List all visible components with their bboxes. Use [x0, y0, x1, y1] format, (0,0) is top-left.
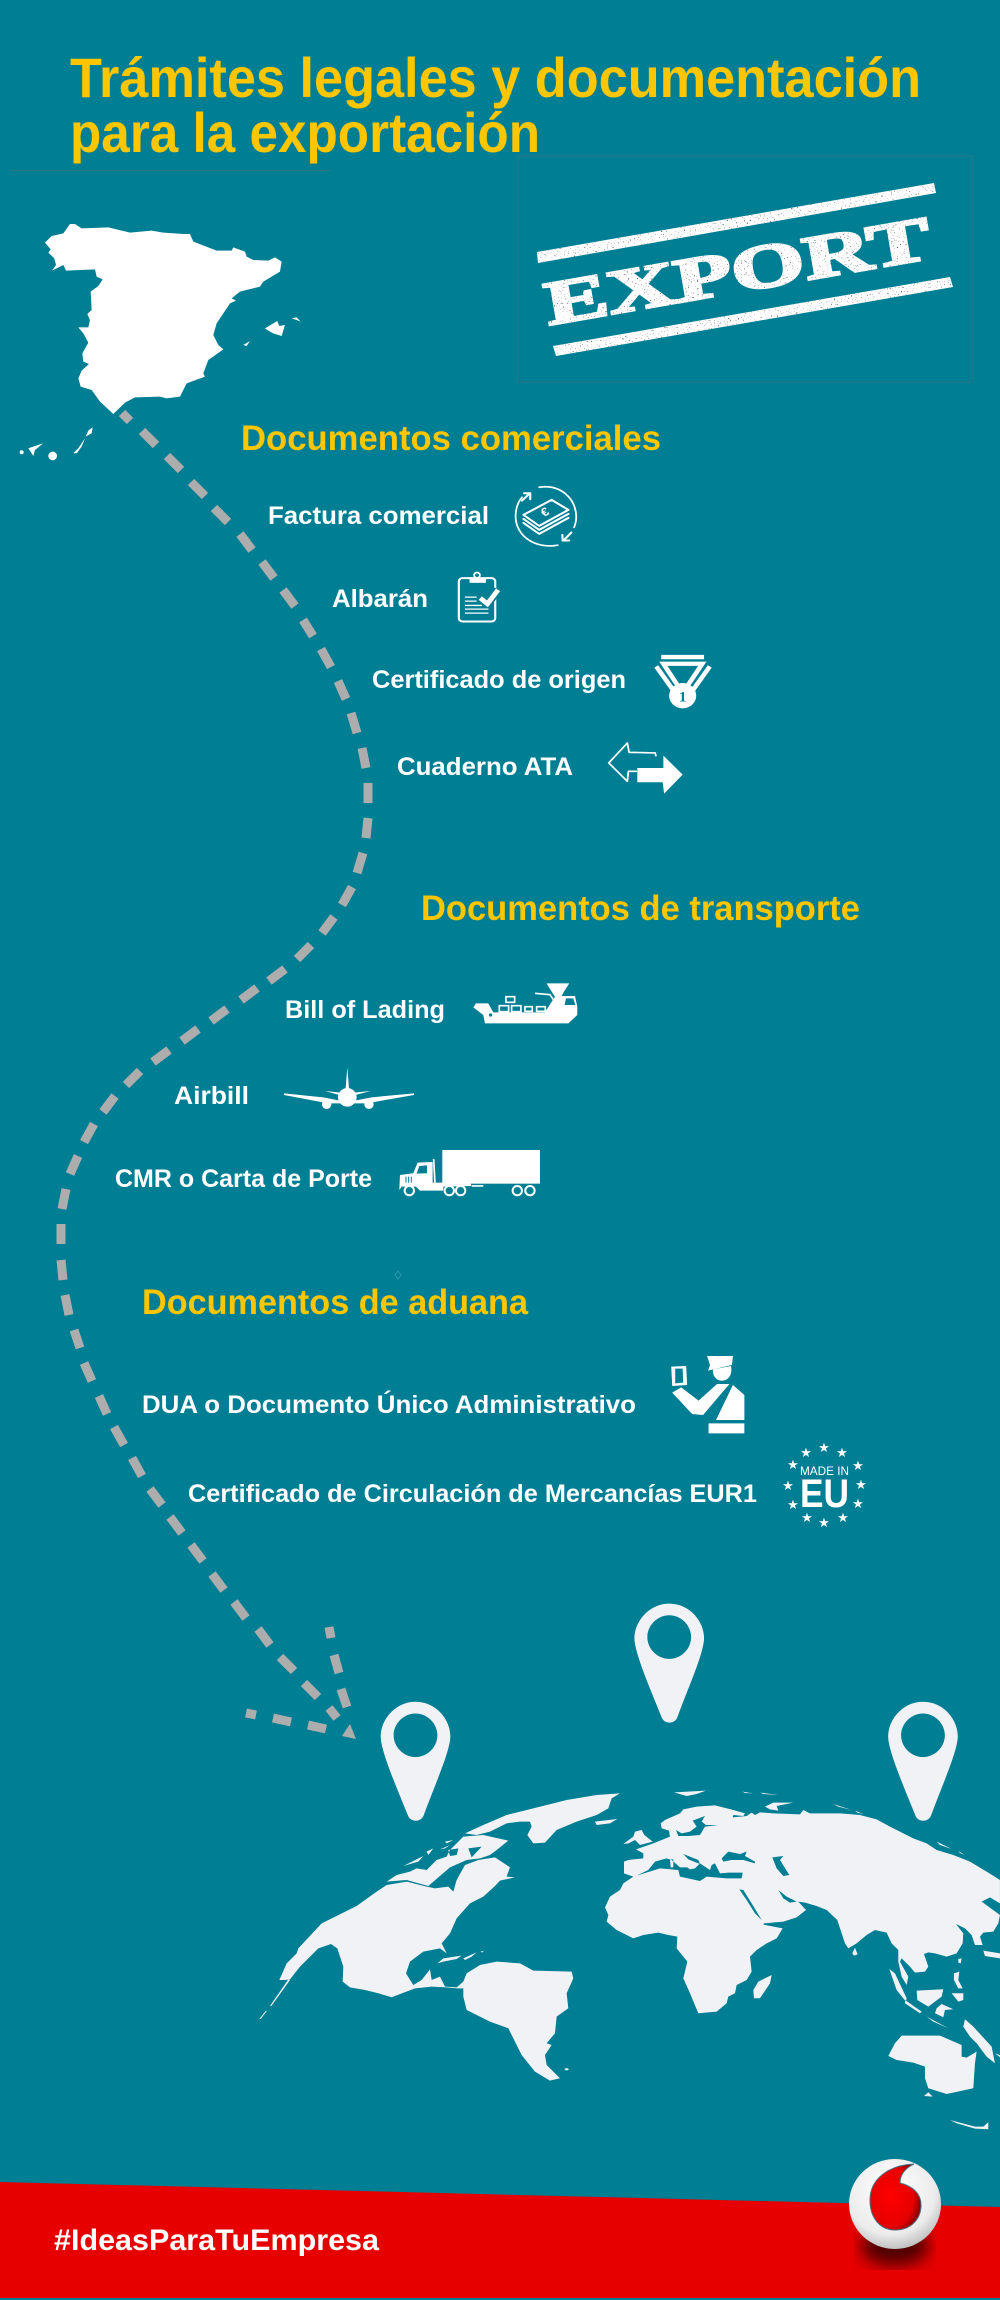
icon: made in EU: ★ — [852, 1459, 864, 1474]
icon: made in EU — [782, 1441, 867, 1531]
icon: made in EU: EU — [800, 1472, 849, 1516]
icon: medal — [656, 657, 710, 708]
dashed route — [61, 413, 368, 1739]
icon: made in EU: ★ — [852, 1497, 864, 1512]
icon: made in EU: ★ — [800, 1446, 812, 1461]
icon: exchange arrows — [609, 743, 683, 794]
icon: made in EU: ★ — [855, 1478, 867, 1493]
label: certificado de origen: Certificado de origen — [372, 666, 626, 694]
heading: documentos de aduana: Documentos de aduana — [142, 1283, 529, 1322]
world map — [259, 1791, 1000, 2129]
label: albarán: Albarán — [332, 585, 428, 613]
pin right — [888, 1702, 958, 1821]
icon: made in EU: MADE IN — [800, 1464, 849, 1478]
title: para la exportación — [70, 101, 540, 164]
heading: documentos de transporte: Documentos de transporte — [421, 889, 860, 928]
icon: clipboard — [459, 572, 498, 621]
icon: customs officer — [671, 1356, 744, 1433]
hashtag: #IdeasParaTuEmpresa — [54, 2224, 379, 2257]
footer band — [0, 2182, 1000, 2298]
icon: money cycle — [516, 487, 576, 546]
label: factura comercial: Factura comercial — [268, 502, 489, 530]
icon: made in EU: ★ — [837, 1511, 849, 1526]
eurasia, africa and oceania — [605, 1791, 1000, 2129]
icon: airplane — [284, 1067, 414, 1109]
title: Trámites legales y documentación — [70, 46, 921, 109]
export stamp: EXPORT — [540, 205, 936, 339]
heading: documentos comerciales: Documentos comerciales — [241, 419, 661, 458]
icon: made in EU: ★ — [782, 1479, 794, 1494]
icon: made in EU: ★ — [836, 1446, 848, 1461]
export stamp — [518, 156, 972, 382]
pin centre — [634, 1604, 704, 1723]
icon: made in EU: ★ — [818, 1516, 830, 1531]
icon: made in EU: ★ — [787, 1498, 799, 1513]
map of Spain — [20, 224, 301, 460]
label: certificado EUR1: Certificado de Circulación de Mercancías EUR1 — [188, 1480, 757, 1508]
americas and greenland — [259, 1793, 620, 2081]
icon: money cycle: € — [538, 505, 552, 520]
label: bill of lading: Bill of Lading — [285, 996, 445, 1024]
icon: truck — [399, 1150, 540, 1195]
label: DUA: DUA o Documento Único Administrativo — [142, 1389, 636, 1419]
pin left — [381, 1702, 450, 1821]
vodafone logo — [849, 2159, 941, 2266]
arrow head — [246, 1627, 356, 1739]
icon: cargo ship — [473, 983, 577, 1023]
map pins — [381, 1604, 958, 1821]
label: CMR: CMR o Carta de Porte — [115, 1165, 372, 1193]
label: airbill: Airbill — [174, 1082, 249, 1110]
icon: made in EU: ★ — [818, 1441, 830, 1456]
icon: made in EU: ★ — [801, 1511, 813, 1526]
label: cuaderno ATA: Cuaderno ATA — [397, 753, 573, 781]
icon: made in EU: ★ — [787, 1458, 799, 1473]
icon: medal: 1 — [679, 689, 687, 705]
title — [70, 46, 921, 164]
